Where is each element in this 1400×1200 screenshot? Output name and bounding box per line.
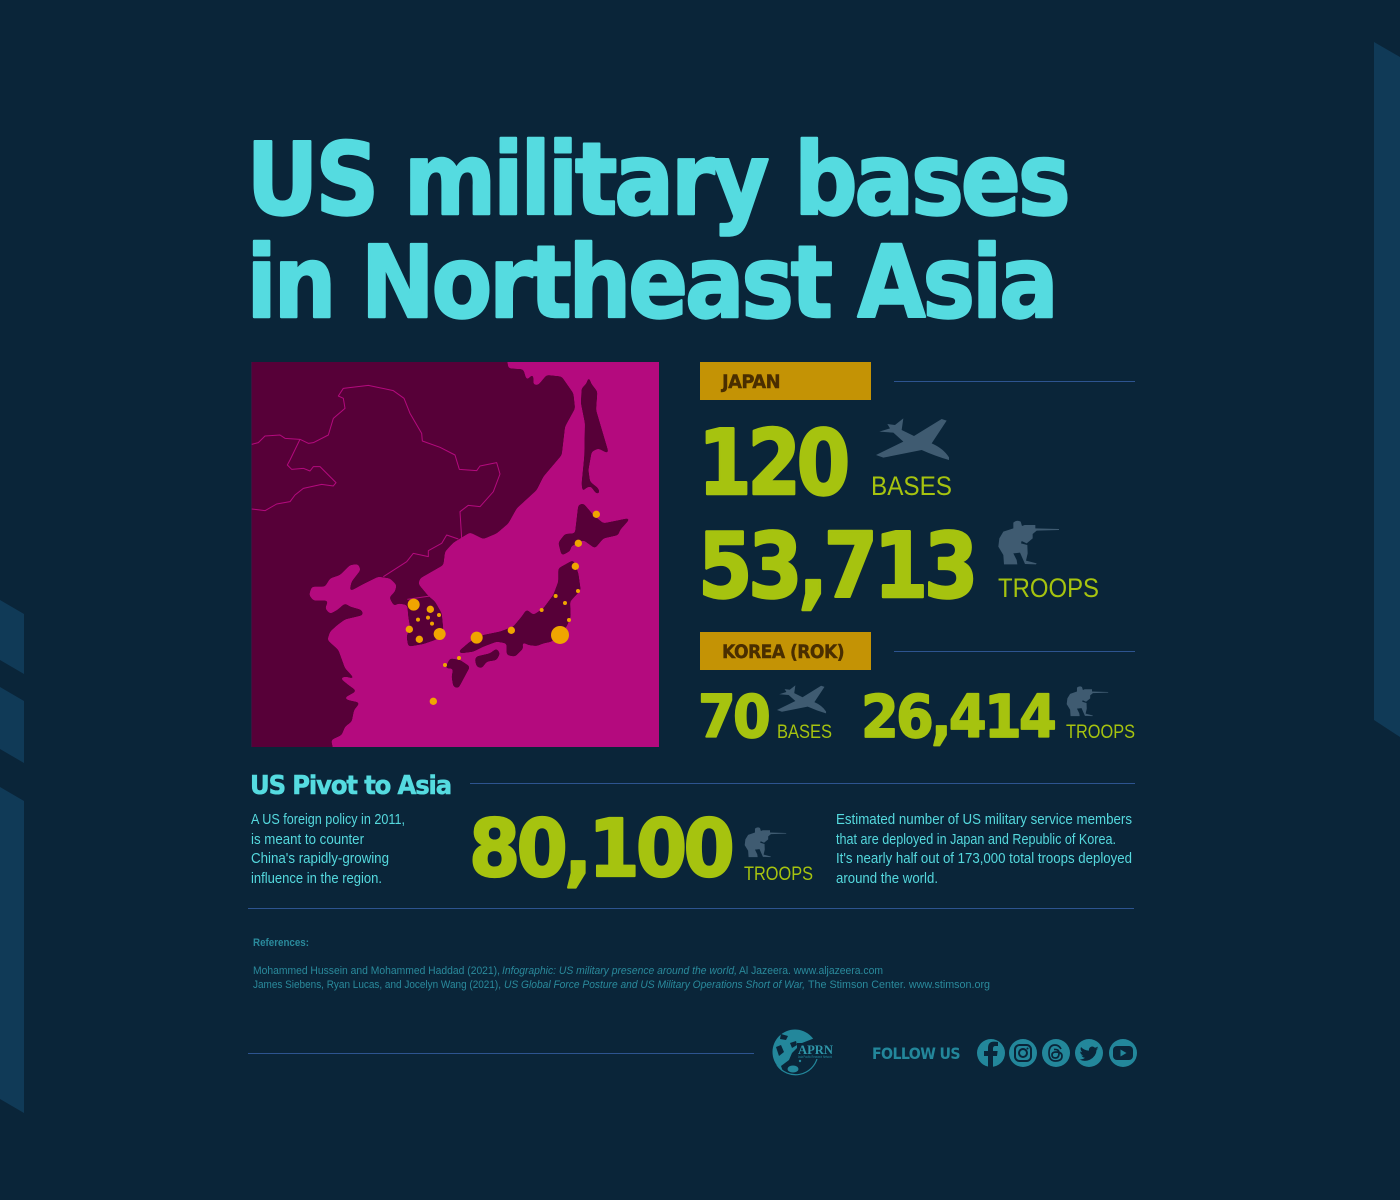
map: bases in Northeast Asia (252, 362, 659, 747)
references: Mohammed Hussein and Mohammed Haddad (2021), (253, 965, 500, 977)
Japan heading: JAPAN (720, 371, 780, 393)
heading: US Pivot to Asia: US Pivot to Asia (250, 771, 451, 801)
text: troops explanation: Estimated number of US military service members (836, 812, 1132, 828)
stat: Japan 53,713 troops: TROOPS (998, 573, 1099, 603)
stat: Korea 70 bases (698, 682, 832, 751)
references: Al Jazeera. www.aljazeera.com (739, 965, 883, 977)
text: pivot description (251, 812, 405, 887)
stat: 80,100 troops: TROOPS (744, 864, 813, 885)
icon: plane small (777, 685, 826, 713)
Korea heading (700, 632, 871, 670)
title (246, 121, 1068, 341)
title: in Northeast Asia (246, 224, 1056, 341)
icon: instagram (1009, 1039, 1037, 1067)
stat: 80,100 troops: 80,100 (469, 803, 732, 895)
map: borders (252, 385, 500, 599)
stat: Korea 70 bases: BASES (777, 722, 832, 743)
references: The Stimson Center. www.stimson.org (808, 979, 990, 991)
Japan heading (700, 362, 871, 400)
text: pivot description: China's rapidly-growing (251, 851, 389, 867)
references: Infographic: US military presence around the world, (502, 965, 737, 977)
icon: soldier (998, 521, 1059, 564)
icon: soldier small (1067, 686, 1108, 716)
map: land masses (252, 362, 628, 747)
logo: APRN globe (772, 1030, 834, 1080)
references: James Siebens, Ryan Lucas, and Jocelyn Wang (2021), (253, 979, 501, 991)
stat: Korea 70 bases: 70 (698, 682, 769, 751)
stat: Japan 53,713 troops: 53,713 (698, 514, 974, 619)
text: troops explanation: around the world. (836, 871, 938, 887)
stat: Japan 120 bases: 120 (698, 411, 847, 516)
text: troops explanation (836, 812, 1132, 887)
icon: twitter (1075, 1039, 1103, 1067)
stat: Japan 120 bases: BASES (871, 471, 952, 501)
references: US Global Force Posture and US Military Operations Short of War, (504, 979, 805, 991)
text: pivot description: A US foreign policy in 2011, (251, 812, 405, 828)
follow us label: FOLLOW US (872, 1044, 960, 1063)
icon: plane (876, 418, 949, 460)
logo: APRN globe: Asia Pacific Research Network (798, 1055, 832, 1059)
Korea heading: KOREA (ROK) (722, 641, 844, 663)
text: troops explanation: that are deployed in Japan and Republic of Korea. (836, 832, 1116, 848)
icon: facebook (977, 1039, 1005, 1067)
text: troops explanation: It's nearly half out of 173,000 total troops deployed (836, 851, 1132, 867)
icon: youtube (1109, 1039, 1137, 1067)
stat: Korea 26,414 troops: TROOPS (1066, 722, 1135, 743)
map: base markers (406, 511, 600, 705)
references (253, 937, 990, 991)
references: References: (253, 937, 309, 949)
text: pivot description: is meant to counter (251, 832, 364, 848)
title: US military bases (246, 121, 1068, 238)
icon: soldier total (745, 827, 786, 857)
icon: threads (1042, 1039, 1070, 1067)
stat: Korea 26,414 troops: 26,414 (861, 682, 1055, 751)
logo: APRN globe: APRN (798, 1042, 834, 1057)
text: pivot description: influence in the region. (251, 871, 382, 887)
stat: Japan 120 bases (698, 411, 952, 516)
